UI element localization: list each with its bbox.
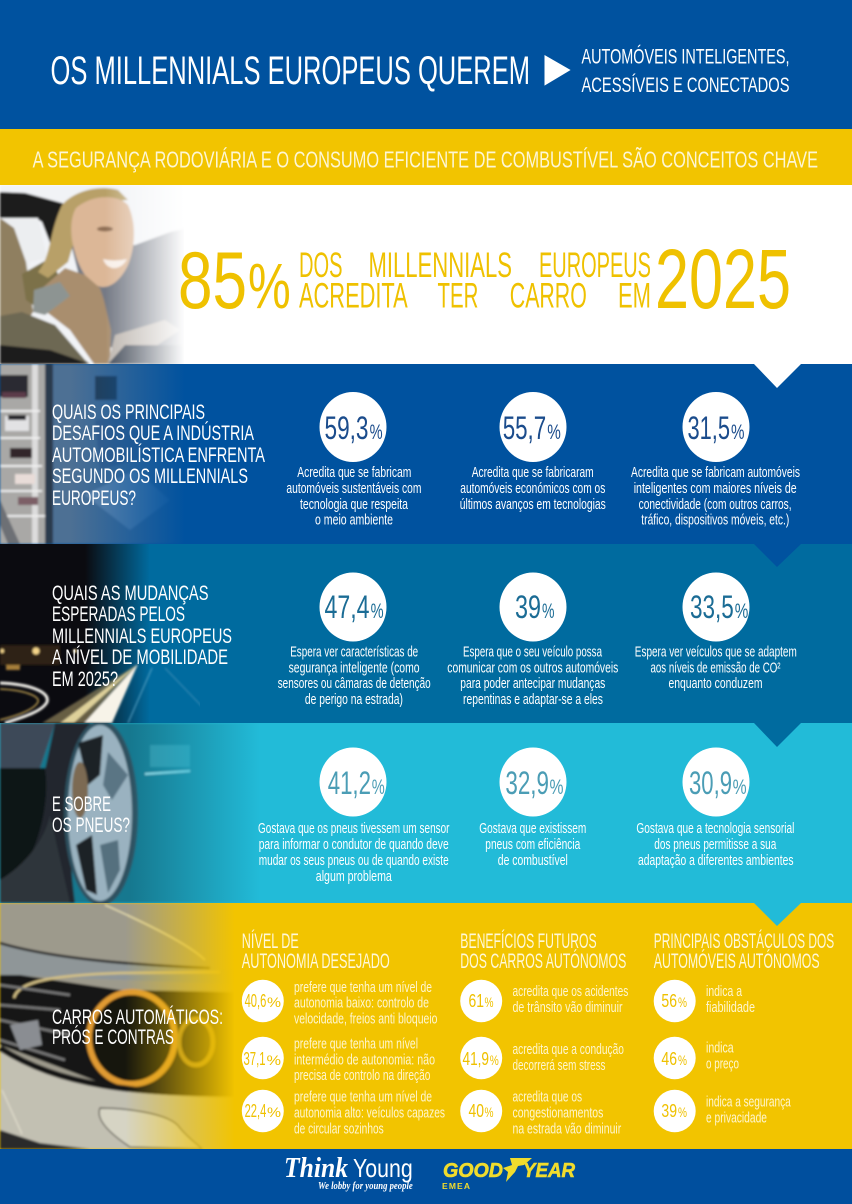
text: segurança e privacidade: indica a segurança [706,1095,791,1111]
stat: 37,1%: 37,1 [244,1049,266,1069]
stat: 37,1%: % [266,1052,281,1068]
heading: carros automáticos: PRÓS E CONTRAS [52,1024,174,1049]
column: nível de autonomia [242,928,445,1137]
text: comunicar: Espera que o seu veículo possa [463,645,603,661]
text: eficiência: de combustível [498,853,568,869]
stat: 40,6%: % [267,994,281,1010]
text: autonomia alta: prefere que tenha um nível de [294,1090,432,1106]
text: adaptação [636,821,794,869]
text: autonomia alta [294,1090,445,1137]
icon: section chevron [754,903,801,926]
text: congestionamentos: acredita que os [512,1090,582,1106]
text: congestionamentos: na estrada vão diminuir [512,1121,621,1137]
yellow banner [0,129,852,185]
icon: section chevron [754,723,801,747]
column heading: NÍVEL DE [242,928,299,953]
heading: carros automáticos [52,1004,223,1049]
stat: 59,3% [320,392,386,462]
stat: 30,9% [682,748,750,816]
text: condução [512,1042,624,1074]
text: sensor: para informar o condutor de quando deve [259,837,449,853]
subtitle [582,43,790,97]
text: preço: indica [706,1041,734,1057]
text: preço: o preço [706,1057,739,1073]
text: segurança e privacidade: e privacidade [706,1111,767,1127]
column heading [242,928,390,973]
text: económicos: automóveis económicos com os [460,481,605,497]
heading: carros automáticos: CARROS AUTOMÁTICOS: [52,1004,223,1029]
panel: desafios [0,364,852,544]
text: emissão: aos níveis de emissão de CO² [650,661,781,677]
text: autonomia intermédia [294,1036,435,1084]
column heading: BENEFÍCIOS FUTUROS [460,928,597,953]
heading: mudanças: MILLENNIALS EUROPEUS [52,624,232,648]
stat: 41,2% [320,748,386,816]
text: autonomia baixo: velocidade, freios anti bloqueio [294,1011,438,1027]
text: dos millennials europeus acredita ter carro em: EM [618,277,651,316]
text: sensor: mudar os seus pneus ou de quando existe [259,853,449,869]
heading: pneus [52,792,130,837]
header band [0,0,852,129]
stat: 22,4%: % [267,1104,281,1120]
stat: 46% [654,1037,696,1079]
text: sustentáveis: automóveis sustentáveis com [286,481,421,497]
stat: 2025: 2025 [655,232,791,326]
text: dos millennials europeus acredita ter carro em: TER [438,277,478,316]
stat: 40,6%: 40,6 [245,991,266,1011]
text: inteligentes: inteligentes com maiores níveis de [634,481,797,497]
icon: section chevron [754,544,801,567]
text: comunicar: repentinas e adaptar-se a eles [463,692,603,708]
text: dos millennials europeus acredita ter carro em: MILLENNIALS [368,246,512,285]
stat: 22,4%: 22,4 [245,1101,266,1121]
stat: 41,9%: 41,9 [462,1049,489,1069]
stat: 39%: 39 [515,589,541,625]
heading: mudanças: QUAIS AS MUDANÇAS [52,581,208,605]
stat: 41,2%: % [372,776,385,799]
heading: desafios: EUROPEUS? [52,486,136,510]
logo: Goodyear: GOOD [443,1160,503,1182]
heading: desafios: DESAFIOS QUE A INDÚSTRIA [52,420,254,445]
stat: 39% [654,1090,696,1132]
logo: Think Young: Think [284,1152,348,1184]
text: económicos: últimos avanços em tecnologias [460,497,606,513]
stat: 41,9%: % [490,1052,499,1068]
stat: 40%: % [484,1104,494,1120]
stat: 46%: % [678,1052,687,1068]
column heading: AUTONOMIA DESEJADO [242,949,390,973]
text: condução: acredita que a condução [512,1042,624,1058]
heading: mudanças [52,581,232,691]
text: autonomia alta: autonomia alto: veículos capazes [294,1105,445,1121]
stat: 39%: % [542,600,554,623]
text: segurança inteligente [278,645,431,708]
text: fiabilidade: fiabilidade [706,1000,755,1016]
column heading [460,928,626,973]
text: económicos: Acredita que se fabricaram [472,465,594,481]
column heading [654,928,834,973]
stat: 41,9% [460,1037,502,1079]
text: económicos [460,465,606,513]
heading: desafios: AUTOMOBILÍSTICA ENFRENTA [52,442,265,467]
heading: desafios: SEGUNDO OS MILLENNIALS [52,464,248,488]
text: inteligentes: conectividade (com outros carros, [639,497,792,513]
text: eficiência: pneus com eficiência [485,837,581,853]
stat: 31,5% [682,392,750,462]
stat: 55,7%: % [547,421,561,444]
text: autonomia intermédia: intermédio de autonomia: não [294,1052,435,1068]
stat: 59,3%: % [370,421,383,444]
stat: 22,4% [242,1090,284,1132]
panel: pneus [0,720,852,906]
stat: 40%: 40 [468,1101,484,1121]
text: dos millennials europeus acredita ter carro em [299,246,651,316]
stat: 33,5%: 33,5 [690,589,734,625]
text: acidentes: de trânsito vão diminuir [512,1000,623,1016]
text: emissão: enquanto conduzem [668,676,762,692]
text: acidentes: acredita que os acidentes [512,984,628,1000]
photo: woman in convertible [0,186,182,364]
title: OS MILLENNIALS EUROPEUS QUEREM [50,49,530,93]
panel: carros automáticos [0,903,852,1149]
text: autonomia baixo: autonomia baixo: controlo de [294,996,429,1012]
stat: 39% [500,572,566,642]
heading: mudanças: EM 2025? [52,667,118,691]
icon: arrow [544,55,571,86]
text: congestionamentos: congestionamentos [512,1105,603,1121]
text: comunicar [447,645,618,708]
stat: 56%: % [678,994,687,1010]
panel: mudanças [0,544,852,723]
text: preço [706,1041,739,1073]
text: adaptação: dos pneus permitisse a sua [654,837,777,853]
logo: Think Young: We lobby for young people [318,1181,413,1192]
text: sensor: algum problema [316,869,392,885]
photo: car wheel [0,720,260,906]
text: fiabilidade [706,984,755,1016]
icon: wingfoot [503,1158,532,1182]
column heading: DOS CARROS AUTÓNOMOS [460,948,626,973]
stat: 32,9%: 32,9 [505,765,549,801]
stat: 85%: 85 [178,236,247,326]
stat: 32,9% [500,748,566,816]
logo: Goodyear: EMEA [442,1181,470,1191]
stat: 33,5% [682,572,750,642]
stat: 31,5%: % [731,421,744,444]
text: segurança e privacidade [706,1095,791,1127]
stat: 33,5%: % [735,600,748,623]
text: adaptação: adaptação a diferentes ambientes [638,853,794,869]
heading: desafios [52,400,265,510]
stat: 47,4%: 47,4 [324,589,370,625]
stat: 39%: % [678,1104,687,1120]
footer [0,1149,852,1204]
stat: 56% [654,980,696,1022]
photo: car tower [0,364,173,544]
text: segurança inteligente: de perigo na estrada) [305,692,403,708]
heading: mudanças: A NÍVEL DE MOBILIDADE [52,644,228,669]
stat: 47,4%: % [371,600,384,623]
text: sustentáveis: Acredita que se fabricam [297,465,411,481]
stat: 30,9%: 30,9 [689,765,732,801]
stat: 31,5%: 31,5 [688,410,730,446]
text: sustentáveis: o meio ambiente [315,513,393,529]
logo: Goodyear: YEAR [523,1160,576,1182]
text: dos millennials europeus acredita ter carro em: DOS [299,246,342,285]
text: autonomia alta: de circular sozinhos [294,1121,384,1137]
stat: 41,2%: 41,2 [328,765,371,801]
text: sensor [258,821,450,885]
text: eficiência: Gostava que existissem [479,821,586,837]
text: segurança inteligente: sensores ou câmaras de detenção [278,676,431,692]
text: comunicar: comunicar com os outros automóveis [447,661,618,677]
text: segurança inteligente: Espera ver características de [290,645,418,661]
stat: 61% [460,980,502,1022]
text: autonomia baixo: prefere que tenha um nível de [294,980,432,996]
text: autonomia intermédia: prefere que tenha um nível [294,1036,418,1052]
photo: night highway [0,544,215,723]
heading: pneus: OS PNEUS? [52,813,130,837]
stat: 61%: 61 [468,991,484,1011]
photo: headlight [0,903,254,1149]
stat: 61%: % [484,994,494,1010]
text: emissão [635,645,797,692]
text: condução: decorrerá sem stress [512,1058,606,1074]
text: eficiência [479,821,586,869]
stat: 59,3%: 59,3 [324,410,368,446]
stat: 39%: 39 [661,1101,677,1121]
text: fiabilidade: indica a [706,984,743,1000]
column: principais obstáculos [654,928,834,1132]
text: segurança inteligente: segurança inteligente (como [289,661,420,677]
logo: Think Young: Young [353,1153,413,1183]
stat: 55,7% [500,392,566,462]
heading: desafios: QUAIS OS PRINCIPAIS [52,400,205,424]
stat: 47,4% [320,572,386,642]
text: dos millennials europeus acredita ter carro em: ACREDITA [299,277,408,316]
text: autonomia intermédia: precisa de controlo na direção [294,1068,430,1084]
text: dos millennials europeus acredita ter carro em: EUROPEUS [539,246,651,285]
stat: 32,9%: % [550,776,564,799]
text: sustentáveis: tecnologia que respeita [300,497,409,513]
text: dos millennials europeus acredita ter carro em: CARRO [510,277,587,316]
stat: 40% [460,1090,502,1132]
text: acidentes [512,984,628,1016]
text: inteligentes: tráfico, dispositivos móveis, etc.) [641,513,789,529]
panel: 85% headline [0,185,852,365]
text: sensor: Gostava que os pneus tivessem um sensor [258,821,450,837]
text: autonomia baixo [294,980,438,1027]
heading: mudanças: ESPERADAS PELOS [52,602,185,626]
stat: 40,6% [242,980,284,1022]
heading: pneus: E SOBRE [52,792,111,816]
logo: Goodyear [442,1158,576,1191]
icon: section chevron [754,364,801,388]
text: comunicar: para poder antecipar mudanças [460,676,605,692]
text: congestionamentos [512,1090,621,1137]
text: sustentáveis [286,465,421,529]
logo: Think Young [284,1152,413,1192]
stat: 46%: 46 [661,1049,677,1069]
stat: 85%: % [248,250,291,322]
stat: 55,7%: 55,7 [503,410,546,446]
text: inteligentes [631,465,800,529]
stat: 30,9%: % [733,776,747,799]
column: benefícios futuros [460,928,628,1137]
stat: 37,1% [242,1037,284,1079]
stat: 56%: 56 [661,991,677,1011]
